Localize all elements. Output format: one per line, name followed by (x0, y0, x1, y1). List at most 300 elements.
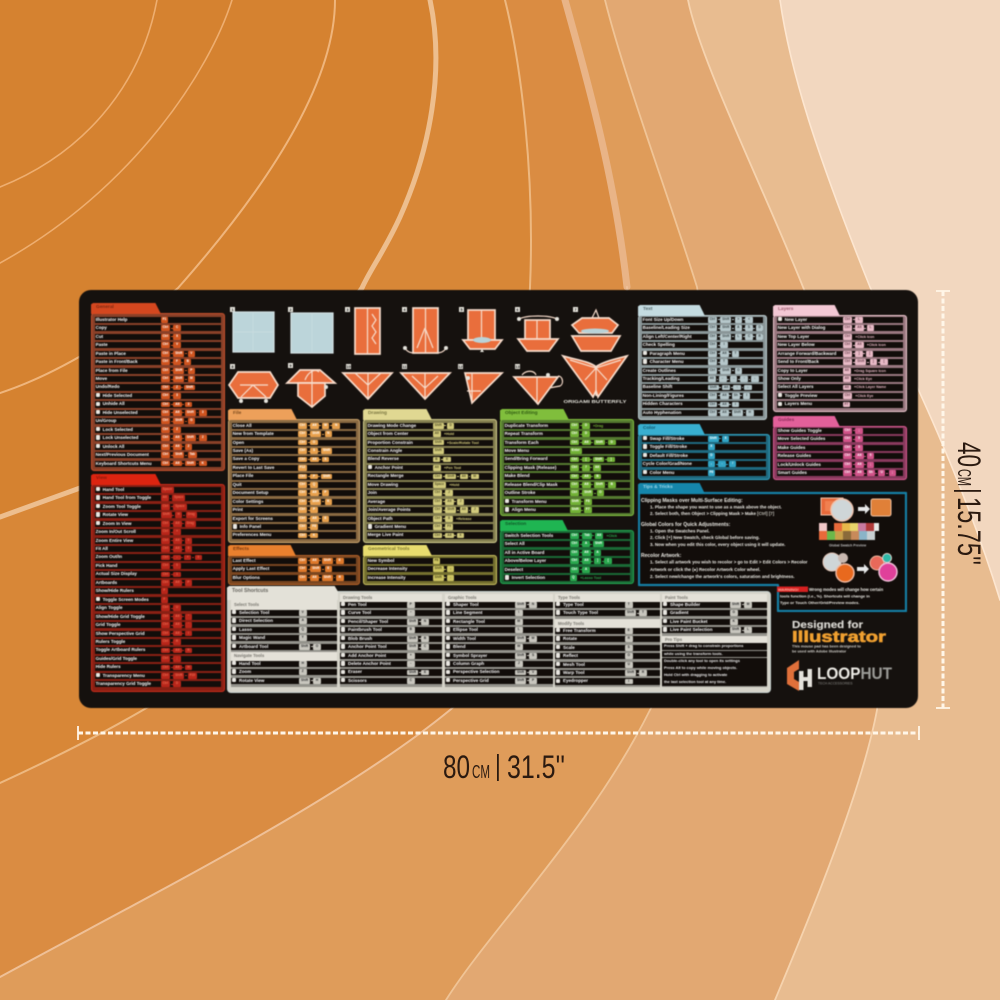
column: Type and Modify Tools: Shift (627, 670, 634, 674)
column: Select and Navigate Tools: Direct Selection (239, 618, 273, 623)
Object Editing shortcut rows: Shift (572, 499, 579, 503)
clipping mask illustration (821, 498, 891, 521)
Drawing shortcut rows: Alt (435, 431, 439, 435)
File shortcut rows: P (313, 474, 315, 478)
column: Type and Modify Tools: Warp Tool (563, 670, 584, 675)
Drawing shortcut rows: +Pen Tool (444, 466, 461, 470)
General shortcut rows: Ctrl (163, 325, 168, 329)
recolor artwork tip: Recolor Artwork: (641, 553, 682, 559)
General shortcut rows: Shift (175, 376, 182, 380)
column: Paint Tools and Pro Tips: the last selection tool at any time. (664, 679, 726, 684)
Object Editing shortcut rows: Alt (584, 440, 589, 444)
View shortcut rows (91, 484, 225, 692)
Text shortcut rows: O (737, 368, 740, 372)
File shortcut rows: P (313, 507, 315, 511)
Selection shortcut rows: Ctrl (572, 533, 577, 537)
Layers shortcut rows: Alt (845, 368, 849, 372)
File shortcut rows: Print (233, 507, 243, 512)
panel: Object Editing (499, 408, 635, 517)
column: Paint Tools and Pro Tips: Live Paint Selection (670, 627, 713, 632)
Guides shortcut rows: 5 (858, 445, 860, 449)
column: Drawing Tools: Anchor Point Tool (348, 644, 387, 649)
View shortcut rows: 1 (176, 572, 178, 576)
Drawing shortcut rows: J (474, 507, 476, 511)
warning note: tools function (i.e., %). Shortcuts will change in (780, 594, 870, 598)
tab: General (91, 303, 161, 314)
Drawing shortcut rows: 8 (448, 516, 450, 520)
Effects shortcut rows: Apply Last Effect (233, 566, 269, 571)
column: Type and Modify Tools: T (628, 602, 630, 606)
General shortcut rows: Undo/Redo (96, 384, 120, 389)
File shortcut rows: Ctrl (300, 516, 305, 520)
panel: Selection (499, 519, 635, 585)
Text shortcut rows: Alt (710, 376, 714, 380)
View shortcut rows: Ctrl (163, 529, 168, 533)
Object Editing shortcut rows: F7 (586, 507, 590, 511)
View shortcut rows: Ctrl (163, 538, 168, 542)
View shortcut rows: + (187, 555, 189, 559)
tab: Guides: Guides (778, 418, 794, 423)
compatibility note: This mouse pad has been designed to (792, 644, 861, 648)
column: Type and Modify Tools: Type Tool (563, 602, 584, 607)
Color shortcut rows: Shift (710, 436, 717, 440)
Guides shortcut rows: Lock/Unlock Guides (778, 462, 821, 467)
Drawing shortcut rows: Merge Live Paint (368, 532, 403, 537)
Drawing shortcut rows: Alt (435, 465, 439, 469)
Effects shortcut rows: Shift (324, 575, 331, 579)
Guides shortcut rows: Move Selected Guides (778, 436, 825, 441)
View shortcut rows: Ctrl (163, 648, 168, 652)
File shortcut rows: Ctrl (300, 431, 305, 435)
column: Paint Tools and Pro Tips: Hold Ctrl with dragging to activate (664, 672, 727, 677)
File shortcut rows: Alt (312, 516, 317, 520)
column: Select and Navigate Tools: Y (302, 635, 304, 639)
General shortcut rows: Alt (175, 435, 180, 439)
General shortcut rows: P (190, 368, 192, 372)
panel: General (90, 302, 226, 472)
General shortcut rows: Ctrl (163, 359, 168, 363)
Layers shortcut rows: ] (873, 359, 874, 363)
Drawing shortcut rows: M (473, 474, 476, 478)
View shortcut rows: F10 (190, 673, 195, 677)
step 3: 3 (346, 307, 349, 312)
Layers shortcut rows: Select All Layers (778, 384, 813, 389)
Layers shortcut rows: Shift (857, 359, 864, 363)
column: Graphic Tools: Shift (517, 653, 524, 657)
Color shortcut rows: Toggle Fill/Stroke (650, 444, 687, 449)
global colors tip (641, 522, 785, 547)
Geometrical Tools shortcut rows: New Symbol (368, 558, 394, 563)
column: Type and Modify Tools (555, 594, 660, 687)
Selection shortcut rows: +Click (606, 534, 617, 538)
Text shortcut rows: Alt (722, 393, 727, 397)
Guides shortcut rows: Ctrl (845, 470, 850, 474)
File shortcut rows: Ctrl (300, 457, 305, 461)
Text shortcut rows: → (732, 376, 735, 380)
View shortcut rows: R (187, 648, 190, 652)
View shortcut rows: U (176, 605, 178, 609)
Object Editing shortcut rows: Shift (595, 457, 602, 461)
File shortcut rows: Ctrl (300, 448, 305, 452)
Selection shortcut rows: [ (608, 558, 609, 562)
column: Drawing Tools: Blob Brush (348, 636, 372, 641)
Drawing shortcut rows: Ctrl (435, 524, 440, 528)
Selection shortcut rows: Ctrl (572, 567, 577, 571)
Selection shortcut rows: Alt (584, 550, 589, 554)
File shortcut rows: N (335, 423, 337, 427)
column: Graphic Tools: W (532, 636, 535, 640)
width label (443, 749, 565, 785)
Object Editing shortcut rows: Duplicate Transform (505, 423, 548, 428)
File shortcut rows: N (327, 431, 329, 435)
tab: Tool Shortcuts (227, 586, 338, 600)
column: Select and Navigate Tools: Navigate Tools (234, 653, 264, 658)
compatibility note (792, 644, 861, 654)
Text shortcut rows: Shift (722, 334, 729, 338)
Guides shortcut rows: 5 (858, 436, 860, 440)
File shortcut rows: Close All (233, 423, 252, 428)
General shortcut rows: Ctrl (163, 368, 168, 372)
General shortcut rows: Unhide All (103, 401, 125, 406)
General shortcut rows: Shift (187, 435, 194, 439)
tab: View: View (96, 476, 107, 481)
column: Type and Modify Tools: U (628, 662, 630, 666)
Text shortcut rows: ↑ (736, 385, 738, 389)
View shortcut rows: H (187, 664, 190, 668)
tab: Layers: Layers (778, 307, 793, 312)
column: Drawing Tools: Shift (409, 670, 416, 674)
Text shortcut rows: I (724, 342, 725, 346)
tab: Color: Color (643, 426, 656, 431)
column: Type and Modify Tools: Eyedropper (563, 678, 588, 683)
Layers shortcut rows: New Layer Below (778, 342, 815, 347)
column: Graphic Tools: P (532, 678, 534, 682)
General shortcut rows: Shift (175, 418, 182, 422)
width label: 80 (443, 749, 470, 785)
View shortcut rows: " (188, 614, 189, 618)
General shortcut rows: 2 (202, 435, 204, 439)
File shortcut rows: W (324, 423, 327, 427)
File shortcut rows: Alt (312, 423, 317, 427)
column: Select and Navigate Tools: H (302, 661, 304, 665)
View shortcut rows: Alt (175, 538, 180, 542)
View shortcut rows: Actual Size Display (96, 571, 137, 576)
File shortcut rows: K (313, 533, 315, 537)
Text shortcut rows: Ctrl (710, 359, 715, 363)
Layers shortcut rows: Ctrl (845, 317, 850, 321)
recolor artwork tip: 1. Select all artwork you wish to recolor > go to Edit > Edit Colors > Recolor (650, 560, 808, 564)
General shortcut rows: Alt (175, 444, 180, 448)
Layers shortcut rows (773, 315, 907, 412)
Text shortcut rows: Sh (734, 393, 738, 397)
column: Graphic Tools: Rectangle Tool (453, 619, 485, 624)
width arrow (78, 726, 919, 740)
column: Paint Tools and Pro Tips: Gradient (670, 610, 689, 615)
Object Editing shortcut rows: O (599, 490, 602, 494)
File shortcut rows: Save (As) (233, 448, 253, 453)
General shortcut rows: K (202, 461, 204, 465)
column: Paint Tools and Pro Tips: while using the transform tools. (664, 651, 723, 656)
column: Graphic Tools: W (517, 644, 520, 648)
Object Editing shortcut rows: Shift (596, 440, 603, 444)
column: Type and Modify Tools: E (628, 628, 630, 632)
View shortcut rows: Alt (175, 521, 180, 525)
panel: Text (637, 304, 768, 421)
Color shortcut rows: X (710, 444, 712, 448)
Drawing shortcut rows: Ctrl (435, 499, 440, 503)
column: Select and Navigate Tools: Magic Wand (239, 635, 265, 640)
View shortcut rows: - (176, 555, 178, 559)
height label: 40 (951, 442, 987, 467)
column: Type and Modify Tools: Shift (627, 610, 634, 614)
Designed for heading: Designed for (792, 620, 863, 631)
tab: File: File (233, 411, 241, 416)
step 12: 12 (458, 364, 463, 369)
Effects shortcut rows: E (327, 566, 329, 570)
Object Editing shortcut rows: Move Menu (505, 448, 529, 453)
Layers shortcut rows: +Click Eye (854, 377, 872, 381)
General shortcut rows: B (187, 359, 189, 363)
column: Drawing Tools: Add Anchor Point (348, 653, 386, 658)
Object Editing shortcut rows: D (611, 440, 613, 444)
Drawing shortcut rows: Ctrl (435, 516, 440, 520)
View shortcut rows: Ctrl (163, 504, 168, 508)
File shortcut rows: Open (233, 440, 244, 444)
Drawing shortcut rows: Join (368, 490, 377, 495)
Layers shortcut rows: +Click Icon (855, 335, 874, 339)
General shortcut rows: Shift (175, 452, 182, 456)
Text shortcut rows: Alt (722, 351, 727, 355)
panel: Effects (227, 544, 361, 586)
Effects shortcut rows: R (339, 575, 341, 579)
Object Editing shortcut rows: 7 (585, 465, 587, 469)
General shortcut rows: Keyboard Shortcuts Menu (96, 460, 152, 466)
column: Type and Modify Tools: T (642, 610, 644, 614)
View shortcut rows: Zoom In/Out Scroll (96, 529, 136, 534)
tab: Tips and Tricks (638, 483, 705, 494)
Object Editing shortcut rows: Send/Bring Forward (505, 456, 548, 461)
global colors tip: 3. Now when you edit this color, every object using it will update. (650, 542, 785, 547)
View shortcut rows: Rotate View (103, 512, 128, 517)
step 9: 9 (289, 363, 292, 368)
File shortcut rows: Alt (312, 490, 317, 494)
Text shortcut rows: Ctrl (710, 334, 715, 338)
column: Select and Navigate Tools: Hand Tool (239, 661, 261, 666)
View shortcut rows: Ctrl (163, 639, 168, 643)
Text shortcut rows: Ctrl (710, 342, 715, 346)
tab: Selection (500, 520, 568, 531)
General shortcut rows: Ctrl (163, 402, 168, 406)
View shortcut rows: Alt (175, 622, 180, 626)
Layers shortcut rows: Copy to Layer (778, 368, 808, 373)
General shortcut rows: Next/Previous Document (96, 452, 149, 457)
General shortcut rows: 3 (202, 410, 204, 414)
tab: Color (638, 424, 705, 435)
Drawing shortcut rows: J (460, 499, 461, 503)
Guides shortcut rows: Alt (857, 453, 862, 457)
column: Paint Tools and Pro Tips: Pro Tips (665, 637, 682, 642)
Drawing shortcut rows: Join/Average Points (368, 507, 411, 512)
column: Graphic Tools: Blend (453, 644, 466, 649)
column: Select and Navigate Tools: Lasso (239, 627, 252, 632)
Text shortcut rows: Align Left/Center/Right (643, 334, 692, 339)
global colors tip: 1. Open the Swatches Panel. (650, 528, 710, 534)
Object Editing shortcut rows: Clipping Mask (Release) (505, 465, 556, 470)
General shortcut rows: Shift (175, 351, 182, 355)
Effects shortcut rows: Shift (324, 558, 331, 562)
Text shortcut rows: Shift (710, 385, 717, 389)
Text shortcut rows: ← (721, 376, 724, 380)
column: Drawing Tools: B (410, 627, 412, 631)
column: Drawing Tools: P (410, 602, 412, 606)
Drawing shortcut rows: +Release (456, 517, 472, 521)
tab: Object Editing: Object Editing (505, 411, 538, 416)
step 1: 1 (231, 307, 234, 312)
Text shortcut rows: L (737, 334, 739, 338)
Color shortcut rows: D (710, 453, 712, 457)
Layers shortcut rows: Alt (857, 325, 862, 329)
View shortcut rows: Ctrl (163, 631, 168, 635)
File shortcut rows: Ctrl (300, 499, 305, 503)
Drawing shortcut rows: B (435, 457, 438, 461)
Color shortcut rows: Cycle Color/Grad/None (643, 461, 692, 466)
step 7 (572, 307, 620, 351)
Geometrical Tools shortcut rows (363, 555, 497, 585)
tab: General: General (96, 305, 114, 310)
Text shortcut rows: Shift (722, 368, 729, 372)
General shortcut rows: Shift (187, 461, 194, 465)
Text shortcut rows: Ctrl (710, 393, 715, 397)
File shortcut rows: O (313, 440, 315, 444)
Color shortcut rows: X (725, 436, 727, 440)
column: Drawing Tools: Drawing Tools (343, 595, 372, 600)
Color shortcut rows: Swap Fill/Stroke (650, 436, 684, 441)
Layers shortcut rows: Ctrl (845, 334, 850, 338)
column: Paint Tools and Pro Tips: Shape Builder (670, 602, 700, 607)
Object Editing shortcut rows: Ctrl (572, 465, 577, 469)
tab: Geometrical Tools: Geometrical Tools (368, 547, 410, 552)
Effects shortcut rows: Ctrl (300, 575, 305, 579)
Effects shortcut rows: Ctrl (300, 558, 305, 562)
column: Graphic Tools: M (517, 619, 520, 623)
column: Type and Modify Tools: Type Tools (558, 595, 580, 600)
Drawing shortcut rows: +Scale/Rotate Tool (447, 440, 479, 444)
column: Select and Navigate Tools: Artboard Tool (239, 644, 268, 649)
Text shortcut rows: ↓ (754, 376, 756, 380)
column: Type and Modify Tools: I (628, 679, 629, 683)
View shortcut rows: Alt (175, 546, 180, 550)
File shortcut rows: Place File (233, 473, 253, 478)
step 8 (229, 364, 278, 403)
View shortcut rows: Pick Hand (96, 563, 117, 568)
clipping masks tip: 1. Place the shape you want to use as a mask above the object. (650, 504, 782, 510)
Color shortcut rows: Color Menu (650, 470, 674, 475)
Layers shortcut rows: +Click Layer Name (854, 385, 886, 389)
Drawing shortcut rows: Object from Center (368, 431, 408, 436)
General shortcut rows (91, 313, 225, 471)
column: Select and Navigate Tools: O (316, 644, 318, 648)
Drawing shortcut rows: Constrain Angle (368, 448, 402, 453)
Text shortcut rows: Shift (722, 325, 729, 329)
Layers shortcut rows: +Drag Square Icon (854, 369, 886, 373)
General shortcut rows: Ctrl (163, 418, 168, 422)
File shortcut rows: Ctrl (300, 507, 305, 511)
View shortcut rows: Toggle Screen Modes (103, 597, 149, 602)
column: Graphic Tools (445, 594, 553, 687)
File shortcut rows: Info Panel (240, 524, 261, 529)
View shortcut rows: F (163, 597, 165, 601)
Guides shortcut rows: ; (870, 462, 871, 466)
Selection shortcut rows: A (585, 567, 587, 571)
General shortcut rows: Ctrl (163, 385, 168, 389)
Effects shortcut rows: Alt (312, 575, 317, 579)
Selection shortcut rows: Tab (584, 533, 590, 537)
step 14: finished butterfly (563, 356, 627, 397)
Guides shortcut rows: ; (892, 470, 893, 474)
Text shortcut rows: A (737, 325, 739, 329)
Layers shortcut rows: L (869, 325, 871, 329)
column: Drawing Tools: + (410, 653, 412, 657)
Object Editing shortcut rows: Alt (595, 465, 599, 469)
column: Graphic Tools: Perspective Selection (453, 669, 500, 674)
Drawing shortcut rows: Shift (435, 440, 442, 444)
Layers shortcut rows: Send to Front/Back (778, 359, 819, 364)
column: Graphic Tools: J (518, 661, 520, 665)
View shortcut rows: Fit All (96, 546, 108, 551)
column: Graphic Tools: V (532, 670, 534, 674)
Drawing shortcut rows: +Hold (444, 432, 454, 436)
step 11 (401, 364, 450, 399)
General shortcut rows: Shift (186, 385, 193, 389)
Layers shortcut rows: Toggle Preview (785, 393, 817, 398)
clipping masks tip: Clipping Masks over Multi-Surface Editing: (641, 498, 743, 504)
File shortcut rows: Export for Screens (233, 516, 273, 521)
column: Paint Tools and Pro Tips: Double-click any tool to open its settings (664, 658, 740, 663)
column: Select and Navigate Tools: A (302, 618, 304, 622)
Text shortcut rows: Alt (724, 385, 728, 389)
Object Editing shortcut rows (500, 419, 634, 516)
column: Drawing Tools: C (424, 644, 426, 648)
Object Editing shortcut rows: Shift (572, 507, 579, 511)
View shortcut rows: Alt (175, 648, 180, 652)
General shortcut rows: Alt (175, 461, 180, 465)
View shortcut rows: Ctrl (163, 563, 168, 567)
Layers shortcut rows: [ (869, 351, 870, 355)
File shortcut rows: Alt (312, 457, 317, 461)
Object Editing shortcut rows: F8 (586, 499, 590, 503)
View shortcut rows: Show/Hide Grid Toggle (96, 614, 145, 619)
panel: File (227, 408, 361, 544)
View shortcut rows: 0 (198, 555, 199, 559)
Object Editing shortcut rows: Alt (584, 482, 589, 486)
column: Drawing Tools: Pencil/Shaper Tool (348, 619, 388, 624)
Drawing shortcut rows: Rectangle Merge (368, 473, 404, 478)
panel: Geometrical Tools (362, 544, 498, 586)
tips content and illustrations (637, 491, 908, 613)
View shortcut rows: Alt (175, 580, 180, 584)
General shortcut rows: Ctrl (163, 452, 168, 456)
column: Type and Modify Tools: Modify Tools (558, 621, 584, 626)
File shortcut rows: Shift (323, 474, 330, 478)
Color shortcut rows: / (732, 461, 733, 465)
tab: Text (638, 305, 705, 316)
Object Editing shortcut rows: Enter (572, 448, 580, 452)
Text shortcut rows: Ctrl (710, 410, 715, 414)
column: Drawing Tools: Delete Anchor Point (348, 661, 391, 666)
tab: Selection: Selection (505, 522, 526, 527)
width label: 31.5'' (507, 749, 565, 785)
column: Select and Navigate Tools: Shift (301, 678, 308, 682)
